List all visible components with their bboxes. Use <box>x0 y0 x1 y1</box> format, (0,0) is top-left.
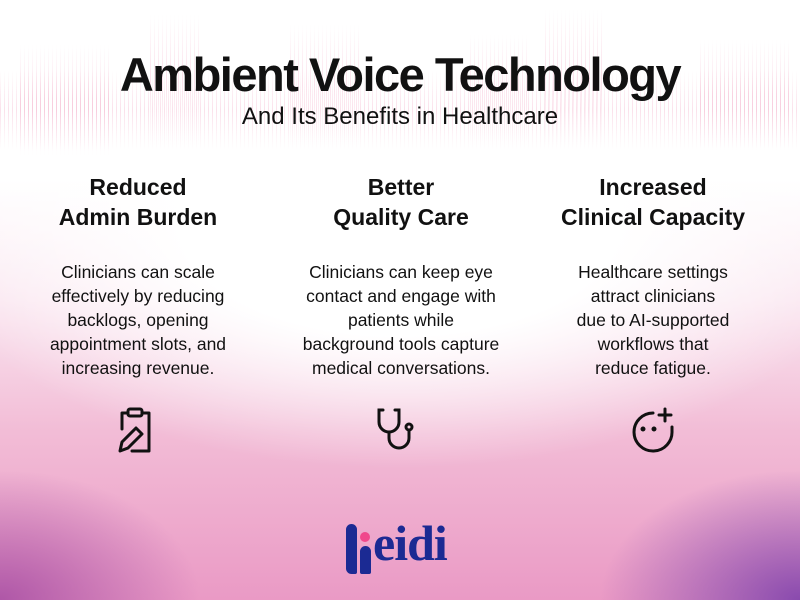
logo: heidi: eidi <box>373 515 447 571</box>
icon: face plus <box>632 408 674 452</box>
panel: better quality care: medical conversations. <box>312 358 490 378</box>
panel: increased clinical capacity: Clinical Capacity <box>561 204 745 230</box>
panel: reduced admin burden: effectively by reducing <box>52 286 224 306</box>
icon: stethoscope <box>378 408 414 450</box>
title: Ambient Voice Technology <box>120 48 680 101</box>
panel: better quality care: Clinicians can keep eye <box>309 262 493 282</box>
waveform background <box>0 28 797 146</box>
panel: better quality care: background tools capture <box>303 334 499 354</box>
panel: increased clinical capacity: reduce fatigue. <box>595 358 711 378</box>
panel: better quality care: patients while <box>348 310 454 330</box>
panel: reduced admin burden: appointment slots, and <box>50 334 226 354</box>
panel: increased clinical capacity: due to AI-supported <box>577 310 729 330</box>
panel: better quality care: Quality Care <box>333 204 469 230</box>
panel: better quality care: contact and engage with <box>306 286 496 306</box>
panel: reduced admin burden <box>50 174 226 378</box>
panel: reduced admin burden: increasing revenue. <box>62 358 214 378</box>
subtitle: And Its Benefits in Healthcare <box>242 103 558 130</box>
panel: increased clinical capacity: attract clinicians <box>591 286 715 306</box>
panel: reduced admin burden: Admin Burden <box>59 204 217 230</box>
panel: reduced admin burden: backlogs, opening <box>67 310 209 330</box>
panel: better quality care: Better <box>368 174 434 200</box>
panel: better quality care <box>303 174 499 378</box>
panel: increased clinical capacity: Increased <box>599 174 707 200</box>
icon: clipboard pen <box>118 408 150 452</box>
logo: heidi <box>346 515 448 574</box>
panel: increased clinical capacity <box>561 174 745 378</box>
panel: increased clinical capacity: Healthcare settings <box>578 262 728 282</box>
panel: reduced admin burden: Clinicians can scale <box>61 262 215 282</box>
panel: reduced admin burden: Reduced <box>89 174 187 200</box>
panel: increased clinical capacity: workflows that <box>598 334 708 354</box>
